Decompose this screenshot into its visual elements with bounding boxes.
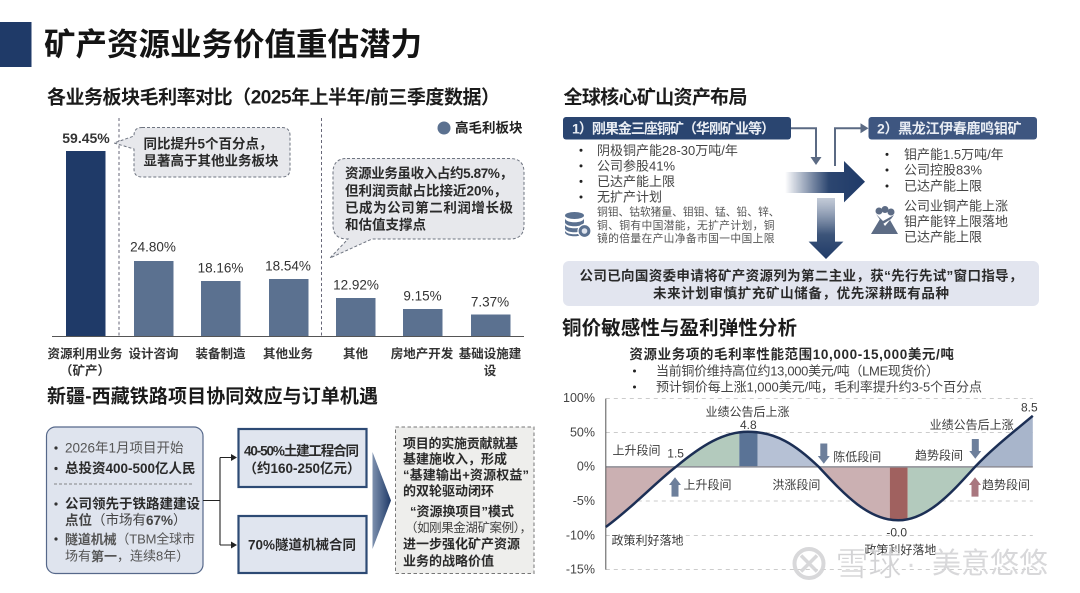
heading: railway: 新疆-西藏铁路项目协同效应与订单机遇 [47,384,378,408]
callout: margin rise: 显著高于其他业务板块 [144,152,279,168]
project facts box: 隧道机械（TBM全球市 [65,532,195,546]
bar chart: 资源利用业务 [47,346,123,361]
strategy banner [563,261,1039,306]
bar chart: 房地产开发 [391,346,454,361]
subheading and notes: 资源业务项的毛利率性能范围10,000-15,000美元/吨 [629,346,954,362]
Heilongjiang mine details: 公司控股83% [904,162,982,178]
Congo mines details: 镜的倍量在产山净备市国一中国上限 [597,231,775,245]
bar chart: （矿产） [60,363,110,378]
project facts box: 公司领先于铁路建建设 [65,496,200,512]
bar chart: 12.92% [333,278,379,292]
header: Congo mines: 1）刚果金三座铜矿（华刚矿业等） [572,120,775,136]
Heilongjiang mine details [886,147,1008,244]
subheading and notes: 预计铜价每上涨1,000美元/吨，毛利率提升约3-5个百分点 [656,380,982,394]
Heilongjiang mine details: 已达产能上限 [904,230,982,244]
cycle area chart: -15% [566,562,595,576]
value box: 基建施收入，形成 [403,452,507,466]
header: Congo mines [563,117,791,140]
bar chart: 18.54% [265,258,311,274]
cycle area chart: 趋势段间 [982,477,1030,492]
header: Heilongjiang mine: 2）黑龙江伊春鹿鸣钼矿 [877,120,1022,136]
Congo mines details [580,143,780,245]
strategy banner: 未来计划审慎扩充矿山储备，优先深耕既有品种 [653,285,949,301]
cycle area chart: 1.5 [667,446,684,460]
cycle area chart: 100% [563,391,595,405]
bar chart: 设 [484,364,497,378]
project facts box [46,427,203,574]
value box: 进一步强化矿产资源 [403,536,520,552]
cycle area chart: -0.0 [886,525,907,539]
callout: margin rise: 同比提升5个百分点， [144,136,273,152]
Congo mines details: 无扩产计划 [597,190,662,204]
value box: （如刚果金湖矿案例）， [405,520,532,535]
bar chart: 其他 [343,346,368,361]
bar chart: 59.45% [62,130,110,146]
Congo mines details: 公司参股41% [597,158,675,173]
cycle area chart [563,391,1038,576]
Heilongjiang mine details: 已达产能上限 [904,178,982,194]
legend: high margin segment: 高毛利板块 [455,120,523,136]
callout: profit contribution [330,158,524,258]
panel: global mine layout [563,86,1039,306]
Congo mines details: 已达产能上限 [597,174,675,189]
watermark: 雪球 [836,546,902,582]
subheading and notes [629,346,982,394]
cycle area chart: 洪涨段间 [772,477,820,492]
watermark: 美意悠悠 [932,547,1048,580]
bar chart: 24.80% [130,240,176,254]
cycle area chart: 4.8 [740,418,757,432]
connector arrows [791,123,868,166]
cycle area chart: 业绩公告后上涨 [930,417,1014,432]
value box: 的双轮驱动闭环 [403,484,494,498]
icon: coin stack [565,212,591,238]
value box [396,427,534,574]
cycle area chart: -10% [566,528,595,542]
contract box: civil works: 40-50%土建工程合同 [244,442,359,458]
cycle area chart: -5% [573,494,595,508]
project facts box: 总投资400-500亿人民 [65,460,196,476]
header accent block [0,22,32,67]
callout: profit contribution: 已成为公司第二利润增长极 [345,200,514,216]
project facts box: 场有第一，连续8年） [65,548,189,564]
bar chart: 7.37% [471,294,509,310]
bar chart: 其他业务 [263,346,313,361]
value box: 业务的战略价值 [403,554,494,568]
cycle area chart: 上升段间 [612,443,661,458]
subheading and notes: 当前铜价维持高位约13,000美元/吨（LME现货价） [656,364,939,378]
Heilongjiang mine details: 公司业铜产能上涨 [904,198,1008,214]
cycle area chart: 政策利好落地 [612,534,684,548]
callout: profit contribution: 资源业务虽收入占约5.87%， [345,165,513,181]
panel: railway synergy [46,384,534,574]
connector arrows [203,454,237,548]
cycle area chart: 业绩公告后上涨 [706,404,790,419]
project facts box: 2026年1月项目开始 [65,440,184,456]
icon: mine ore [871,206,898,234]
heading: copper: 铜价敏感性与盈利弹性分析 [562,318,797,340]
Congo mines details: 阴极铜产能28-30万吨/年 [597,143,738,158]
value box: 项目的实施贡献就基 [403,436,518,451]
panel: gross margin comparison [47,86,524,378]
cycle area chart: 8.5 [1021,400,1038,414]
cycle area chart: 0% [577,460,595,474]
callout: margin rise [114,128,290,177]
cycle area chart: 上升段间 [684,477,732,492]
big right arrow [785,161,865,202]
watermark [794,546,1048,582]
contract box: civil works [238,429,366,487]
bar chart: 基础设施建 [459,346,522,361]
bar chart: 设计咨询 [128,346,179,361]
chevron arrow [372,452,391,549]
title: 矿产资源业务价值重估潜力 [44,26,422,62]
contract box: tunnel machinery: 70%隧道机械合同 [248,536,356,552]
cycle area chart: 趋势段间 [915,447,963,462]
Congo mines details: 铜、铜有中国潜能，无扩产计划，铜 [597,218,775,232]
project facts box: 点位（市场有67%） [65,512,187,528]
bar chart [47,118,524,378]
callout: profit contribution: 和估值支撑点 [345,216,426,232]
value box: “资源换项目”模式 [410,504,514,519]
Heilongjiang mine details: 钼产能1.5万吨/年 [904,147,1004,162]
panel: copper price sensitivity [562,318,1038,576]
contract box: civil works: （约160-250亿元） [243,460,361,476]
strategy banner: 公司已向国资委申请将矿产资源列为第二主业，获“先行先试”窗口指导， [580,268,1022,284]
cycle area chart: 陈低段间 [833,449,881,464]
heading: global mines: 全球核心矿山资产布局 [564,86,748,108]
Heilongjiang mine details: 钼产能锌上限落地 [904,214,1008,229]
contract box: tunnel machinery [238,516,366,573]
watermark: · [906,548,916,580]
bar chart: 18.16% [198,260,243,276]
Congo mines details: 铜钼、钴软猪量、钼钼、锰、铅、锌、 [597,204,780,218]
cycle area chart: 政策利好落地 [864,543,936,557]
heading: gross margin: 各业务板块毛利率对比（2025年上半年/前三季度数据） [47,86,500,108]
bar chart: 装备制造 [195,346,246,361]
callout: profit contribution: 但利润贡献占比接近20%， [345,182,507,198]
big down arrow [809,198,843,259]
bar chart: 9.15% [403,288,442,304]
header: Heilongjiang mine [868,117,1037,140]
value box: “基建输出+资源权益” [403,468,529,482]
cycle area chart: 50% [570,425,595,439]
